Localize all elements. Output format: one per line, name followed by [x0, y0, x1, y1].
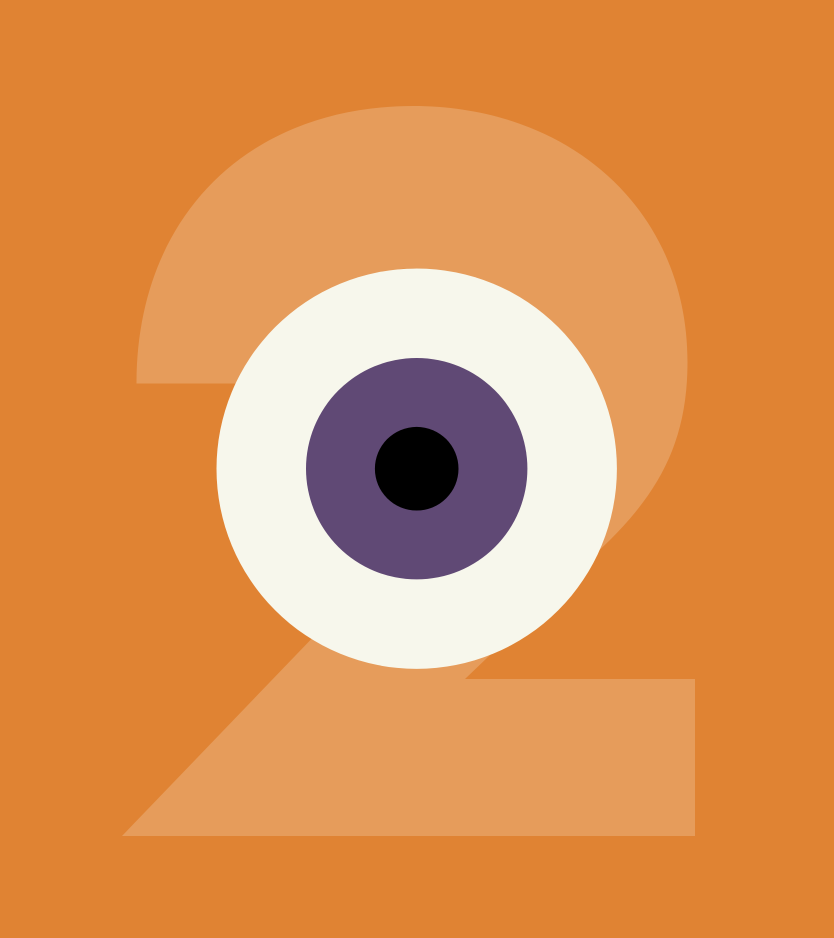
- iris: [306, 358, 527, 579]
- eye: [217, 268, 617, 669]
- eye white: [217, 268, 617, 669]
- pupil: [375, 427, 459, 511]
- large numeral two shape: [122, 106, 695, 836]
